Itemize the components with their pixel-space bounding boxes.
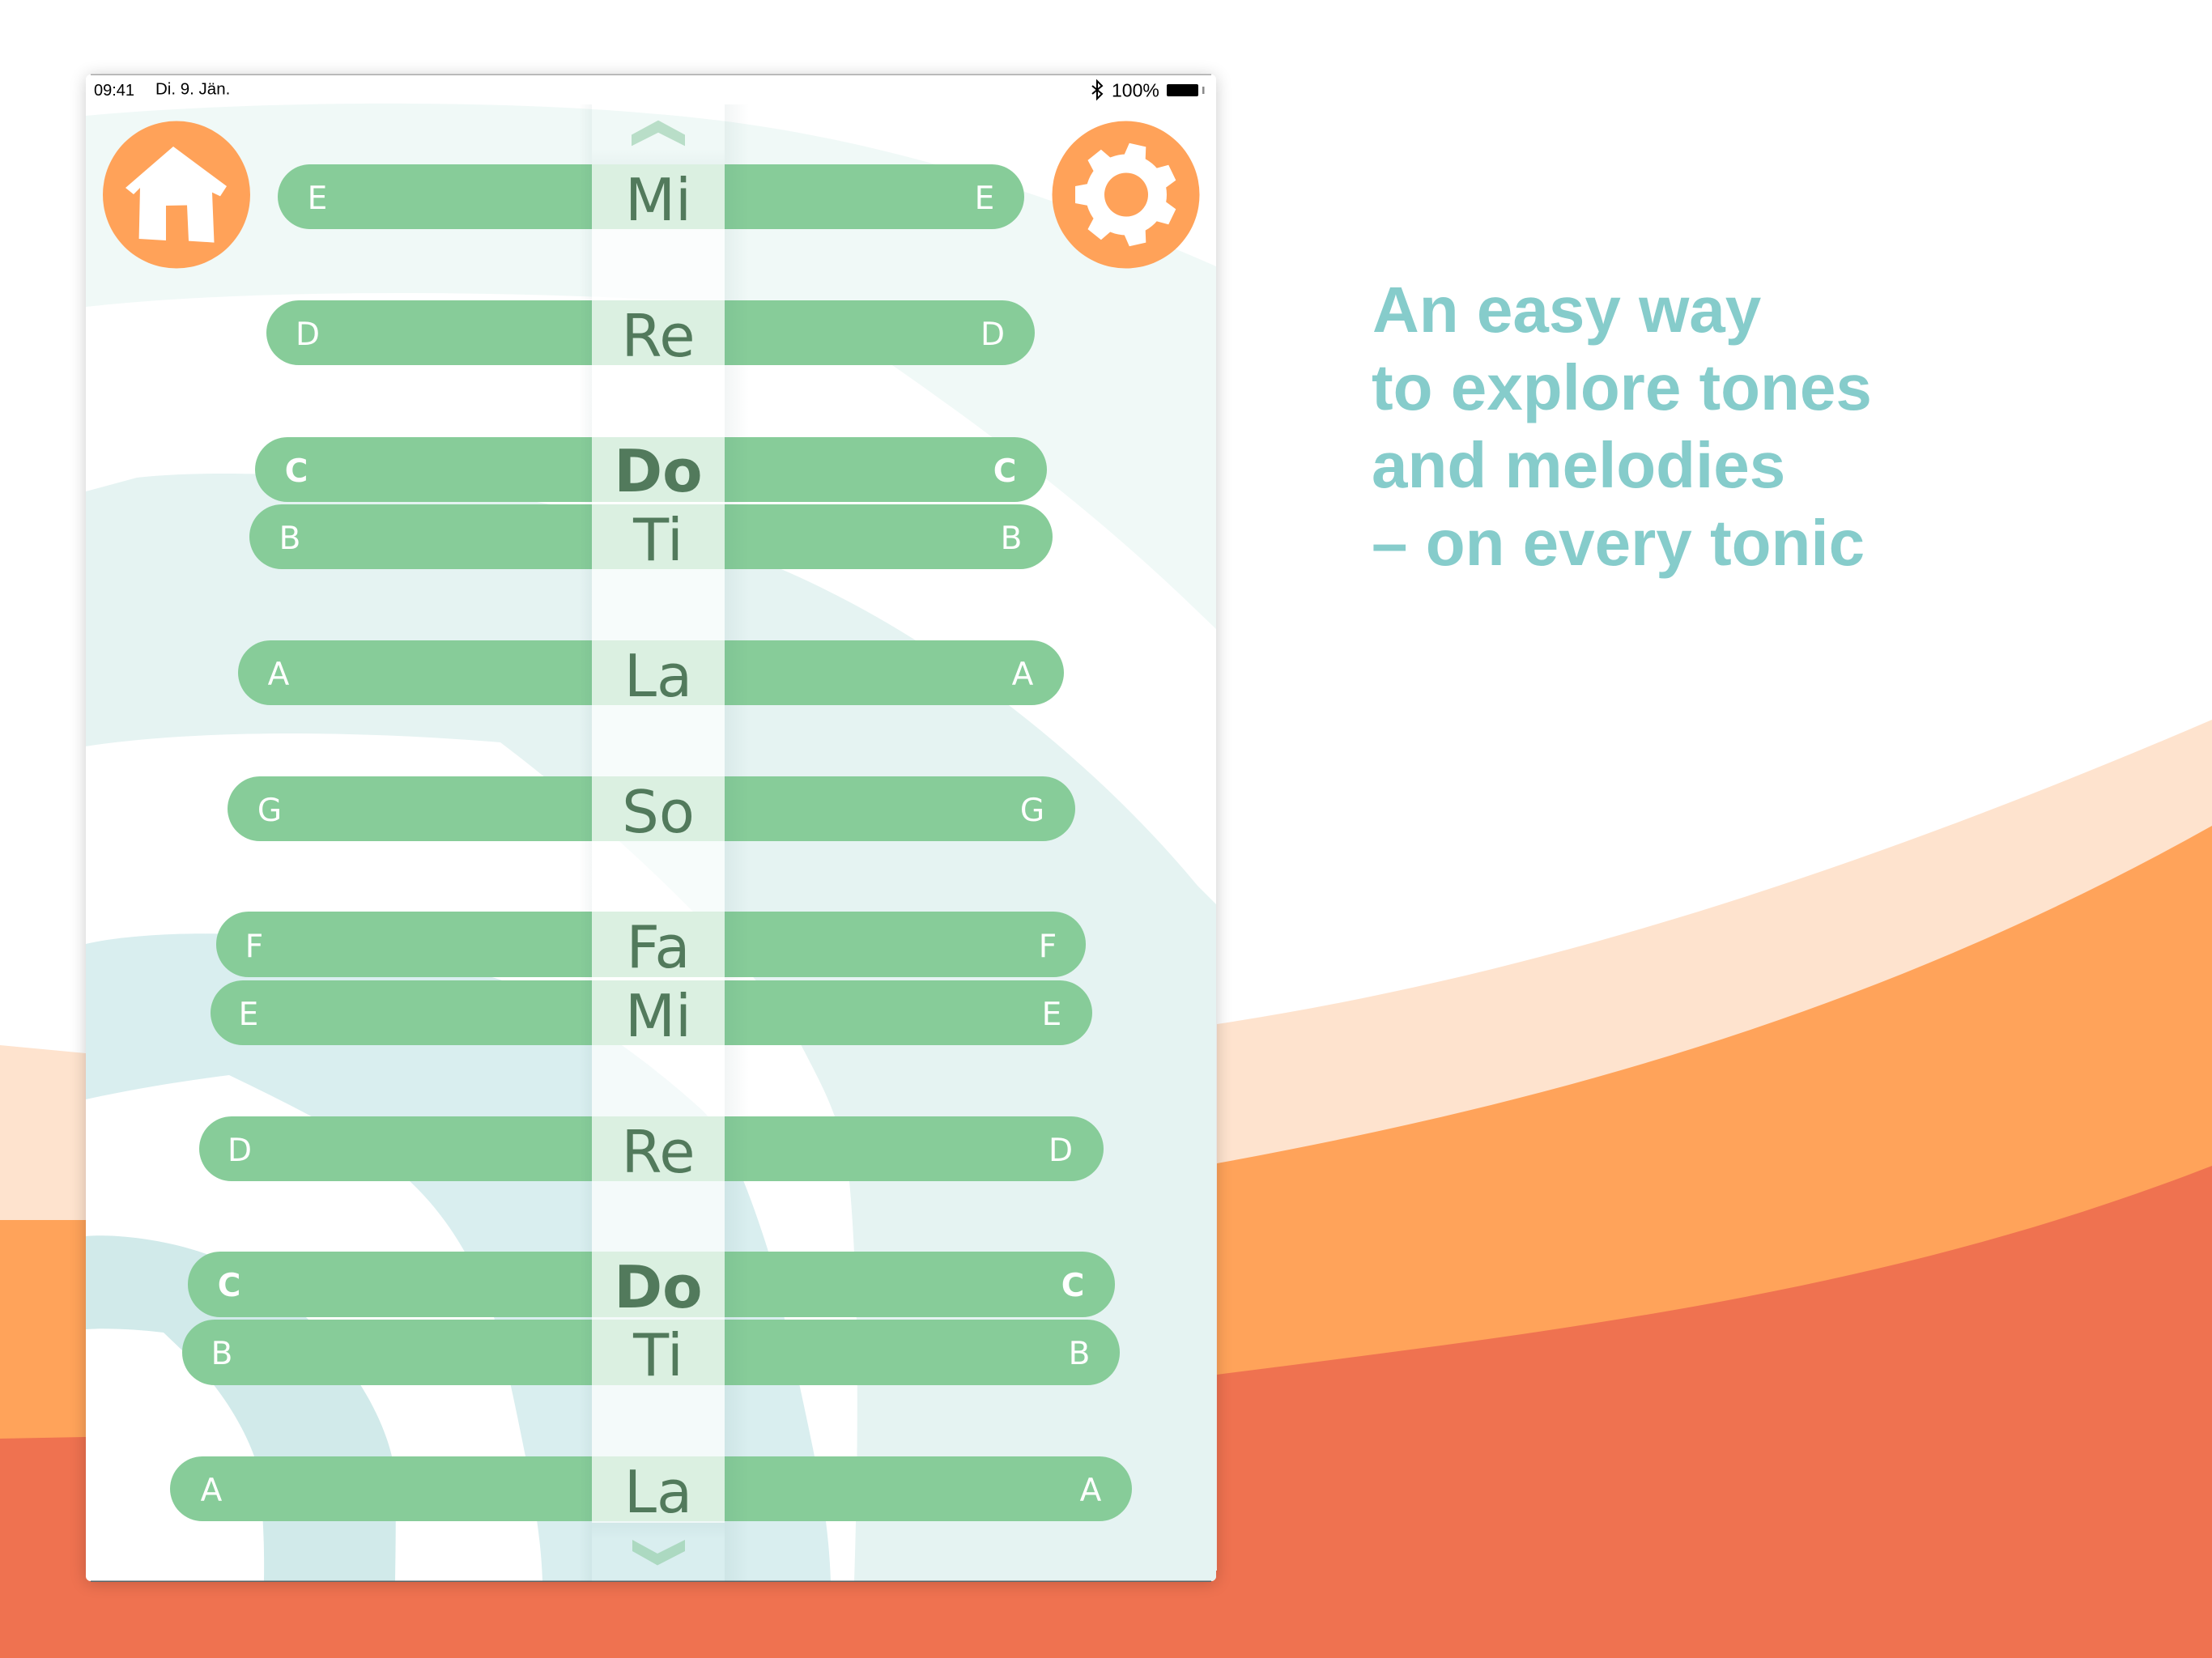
note names left and right: B [1069, 1336, 1090, 1372]
note names left and right: C [1061, 1268, 1084, 1304]
solfege syllables [614, 166, 703, 1526]
solfege syllables: La [624, 642, 692, 710]
solfege syllables: Mi [625, 166, 691, 234]
headline: to explore tones [1372, 351, 1872, 423]
note names left and right: A [201, 1473, 223, 1509]
note names left and right: D [228, 1133, 252, 1169]
note names left and right: F [245, 929, 263, 965]
icon: settings gear button [1053, 121, 1200, 269]
note names left and right: E [239, 997, 258, 1033]
headline: An easy way [1372, 274, 1762, 346]
note names left and right: B [1001, 521, 1022, 557]
icon: bluetooth [1092, 81, 1102, 99]
solfege syllables: Ti [632, 1321, 683, 1389]
note names left and right: G [1020, 793, 1044, 829]
note names left and right: A [1080, 1473, 1102, 1509]
note names left and right: E [975, 181, 994, 217]
note names left and right: E [308, 181, 327, 217]
note names left and right: C [285, 453, 308, 490]
note names left and right: E [1042, 997, 1061, 1033]
solfege syllables: Re [621, 1118, 696, 1186]
icon: home button [103, 121, 250, 269]
solfege syllables: Do [614, 437, 703, 505]
note names left and right: B [279, 521, 300, 557]
headline: – on every tonic [1372, 507, 1865, 579]
headline: and melodies [1372, 429, 1785, 501]
status bar: 09:41 [94, 82, 134, 100]
icon: chevron up [632, 121, 685, 146]
headline [1372, 274, 1872, 579]
icon: chevron down [632, 1540, 685, 1566]
solfege syllables: Do [614, 1253, 703, 1321]
note names left and right: B [211, 1336, 232, 1372]
note names left and right: C [218, 1268, 240, 1304]
note bars [170, 164, 1132, 1521]
note names left and right: D [981, 317, 1005, 353]
note names left and right: D [1049, 1133, 1073, 1169]
note names left and right: C [993, 453, 1016, 490]
status bar [94, 79, 1205, 100]
panel: tablet screenshot [85, 74, 1216, 1583]
note names left and right: G [257, 793, 282, 829]
note names left and right [201, 181, 1102, 1509]
note names left and right: D [296, 317, 320, 353]
status bar: 100% [1112, 79, 1159, 100]
solfege syllables: Fa [627, 913, 690, 981]
note names left and right: A [1012, 657, 1034, 693]
center column overlay [579, 104, 749, 1581]
solfege syllables: Re [621, 302, 696, 370]
note names left and right: A [268, 657, 290, 693]
solfege syllables: Mi [625, 982, 691, 1050]
status bar: Di. 9. Jän. [155, 79, 230, 99]
solfege syllables: So [622, 778, 695, 846]
note names left and right: F [1039, 929, 1057, 965]
solfege syllables: Ti [632, 506, 683, 574]
solfege syllables: La [624, 1458, 692, 1526]
